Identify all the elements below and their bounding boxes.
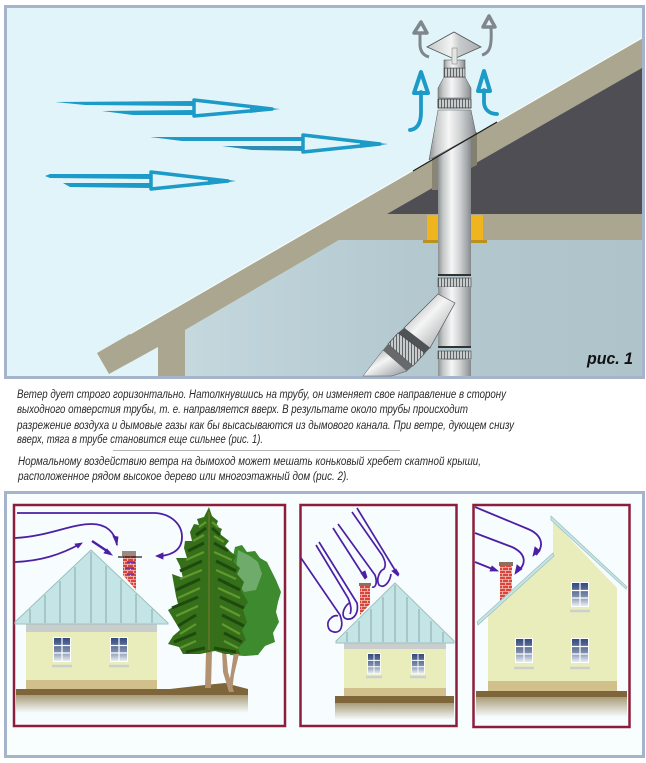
ground (335, 696, 454, 720)
chimney top (438, 60, 471, 108)
chimney (359, 583, 371, 615)
deciduous tree highlight (236, 550, 262, 592)
window (53, 637, 71, 662)
house walls (344, 642, 446, 696)
panel: house with tall tree (14, 505, 285, 726)
chimney cap (427, 32, 481, 58)
dark attic space (387, 68, 642, 214)
roof line at chimney (413, 122, 497, 171)
chimney pipe (438, 135, 471, 376)
icon: grey exhaust arrow right (482, 16, 495, 55)
wind arrows (301, 508, 399, 632)
chimney (499, 562, 513, 601)
text block: explanation: Ветер дует строго горизонтально. Натолкнувшись на трубу, он изменяет свое направление в сторону (17, 389, 507, 401)
window (367, 653, 381, 674)
text block: explanation: Нормальному воздействию ветра на дымоход может мешать коньковый хребет скатной крыши, (18, 456, 481, 468)
window sills (366, 676, 426, 678)
window (571, 582, 589, 607)
icon: grey exhaust arrow left (414, 22, 429, 57)
panel: wind obstacles frame (6, 492, 644, 756)
roof (15, 550, 168, 624)
roof beam (97, 38, 642, 376)
wind arrows (15, 513, 182, 562)
text block: explanation (16, 389, 515, 483)
icon: horizontal wind arrow 1 (55, 100, 280, 116)
text block: explanation: выходного отверстия трубы, т. е. направляется вверх. В результате около трубы происходит (17, 404, 468, 416)
ground (476, 691, 627, 717)
text block: explanation: вверх, тяга в трубе становится еще сильнее (рис. 1). (17, 434, 263, 446)
cap stem (452, 48, 457, 64)
text block: explanation: расположенное рядом высокое дерево или многоэтажный дом (рис. 2). (17, 471, 349, 483)
window (571, 638, 589, 663)
icon: horizontal wind arrow 2 (150, 135, 388, 152)
panel: wind and chimney diagram (6, 6, 644, 378)
panel: house under descending wind (300, 505, 456, 726)
shadow beside pipe (432, 155, 438, 190)
wind arrows (475, 507, 541, 574)
icon: blue up arrow left (410, 72, 428, 130)
icon: horizontal wind arrow 3 (45, 172, 236, 189)
house walls (26, 624, 157, 689)
window (411, 653, 425, 674)
deciduous tree (225, 545, 281, 656)
window sills (514, 611, 590, 668)
panel: house beside taller building (474, 505, 630, 727)
roof (336, 583, 454, 643)
attic interior (185, 240, 642, 376)
tall house wall (488, 521, 617, 681)
chimney (118, 551, 142, 590)
tree trunks (205, 650, 239, 692)
text block: explanation: разрежение воздуха и дымовые газы как бы высасываются из дымового канала. При ветре, дующем снизу (16, 420, 515, 432)
roof slopes (477, 516, 627, 625)
pipe branch (363, 294, 455, 376)
house base (488, 681, 617, 691)
yellow ceiling pass-through (423, 215, 487, 243)
roof flashing cone (429, 110, 476, 160)
window (515, 638, 533, 663)
ground (16, 683, 248, 713)
window (110, 637, 128, 662)
icon: blue up arrow right (478, 71, 497, 114)
spruce tree (168, 507, 248, 654)
figure label 1: рис. 1 (586, 349, 633, 368)
window sills (52, 665, 129, 667)
